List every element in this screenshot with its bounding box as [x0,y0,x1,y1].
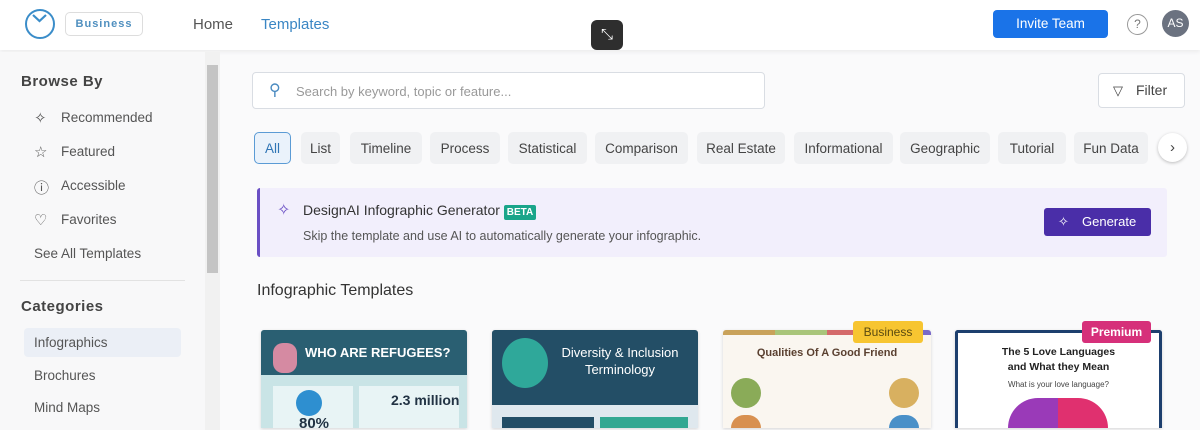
mind maps: Mind Maps [34,400,100,415]
search box: ⚲ [269,82,281,99]
card: love languages: The 5 Love Languages [1002,346,1115,358]
card: good friend [723,330,931,428]
infographics selected: Infographics [34,335,108,350]
favorites [34,212,117,229]
icon: help: ? [1134,17,1141,31]
category chips: Statistical [519,140,576,156]
card: refugees: WHO ARE REFUGEES? [305,345,450,360]
category chips: List [310,140,331,156]
header [0,0,1200,50]
badge: premium: Premium [1091,325,1142,339]
icon: expand [591,20,623,50]
nav home: Home [193,16,233,33]
browse heading: Browse By [21,73,103,90]
search box: Search by keyword, topic or feature... [296,84,511,99]
accessible: Accessible [61,178,126,193]
card: diversity [492,330,698,428]
category chips: Tutorial [1010,140,1054,156]
category chips: Real Estate [706,140,776,156]
AI generator banner: DesignAI Infographic Generator BETA [303,202,533,218]
card: love languages: What is your love language? [1008,380,1109,389]
business badge [65,12,143,36]
section heading: Infographic Templates [257,282,413,299]
accessible: ⓘ [34,180,49,197]
badge: business [853,321,923,343]
badge: premium [1082,321,1151,343]
category chips: Process [441,140,489,156]
featured: ☆ [34,144,47,161]
nav templates: Templates [261,16,329,33]
avatar [1162,10,1189,37]
infographics selected [24,328,181,357]
favorites: ♡ [34,212,47,229]
generate button: ✧ [1058,214,1069,229]
card: refugees: 2.3 million [391,392,459,408]
icon: expand: ⤡ [601,26,613,43]
category chips: All [265,140,280,156]
category chips: Geographic [910,140,980,156]
featured: Featured [61,144,115,159]
recommended: Recommended [61,110,153,125]
brochures: Brochures [34,368,96,383]
scrollbar [205,52,220,430]
favorites: Favorites [61,212,117,227]
generate button [1044,208,1151,236]
badge: business: Business [864,325,912,339]
category chips [254,132,1188,164]
search box [252,72,765,109]
accessible [34,178,126,197]
category chips: Fun Data [1083,140,1139,156]
icon: help [1127,14,1148,35]
generate button: Generate [1082,214,1136,229]
featured [34,144,115,161]
filter button [1098,73,1185,108]
card: love languages [955,330,1162,428]
category chips: › [1170,139,1175,156]
logo [25,9,55,39]
card: love languages: and What they Mean [1008,361,1109,373]
filter button: ▽ [1113,83,1123,98]
invite team button [993,10,1108,38]
category chips: Informational [804,140,883,156]
category chips: Timeline [361,140,411,156]
card: diversity: Diversity & Inclusion [561,345,679,360]
sidebar [0,52,205,430]
recommended [34,110,153,127]
avatar: AS [1167,16,1184,30]
card: diversity: Terminology [585,362,655,377]
AI generator banner: ✧ [277,202,290,219]
invite team button: Invite Team [1016,16,1085,31]
recommended: ✧ [34,110,47,127]
category chips: Comparison [605,140,678,156]
AI generator banner: Skip the template and use AI to automatically generate your infographic. [303,229,701,243]
categories heading: Categories [21,298,104,315]
see all: See All Templates [34,246,141,261]
card: refugees [261,330,467,428]
business badge: Business [76,18,132,30]
filter button: Filter [1136,82,1167,98]
card: good friend: Qualities Of A Good Friend [757,347,897,359]
AI generator banner [257,188,1167,257]
